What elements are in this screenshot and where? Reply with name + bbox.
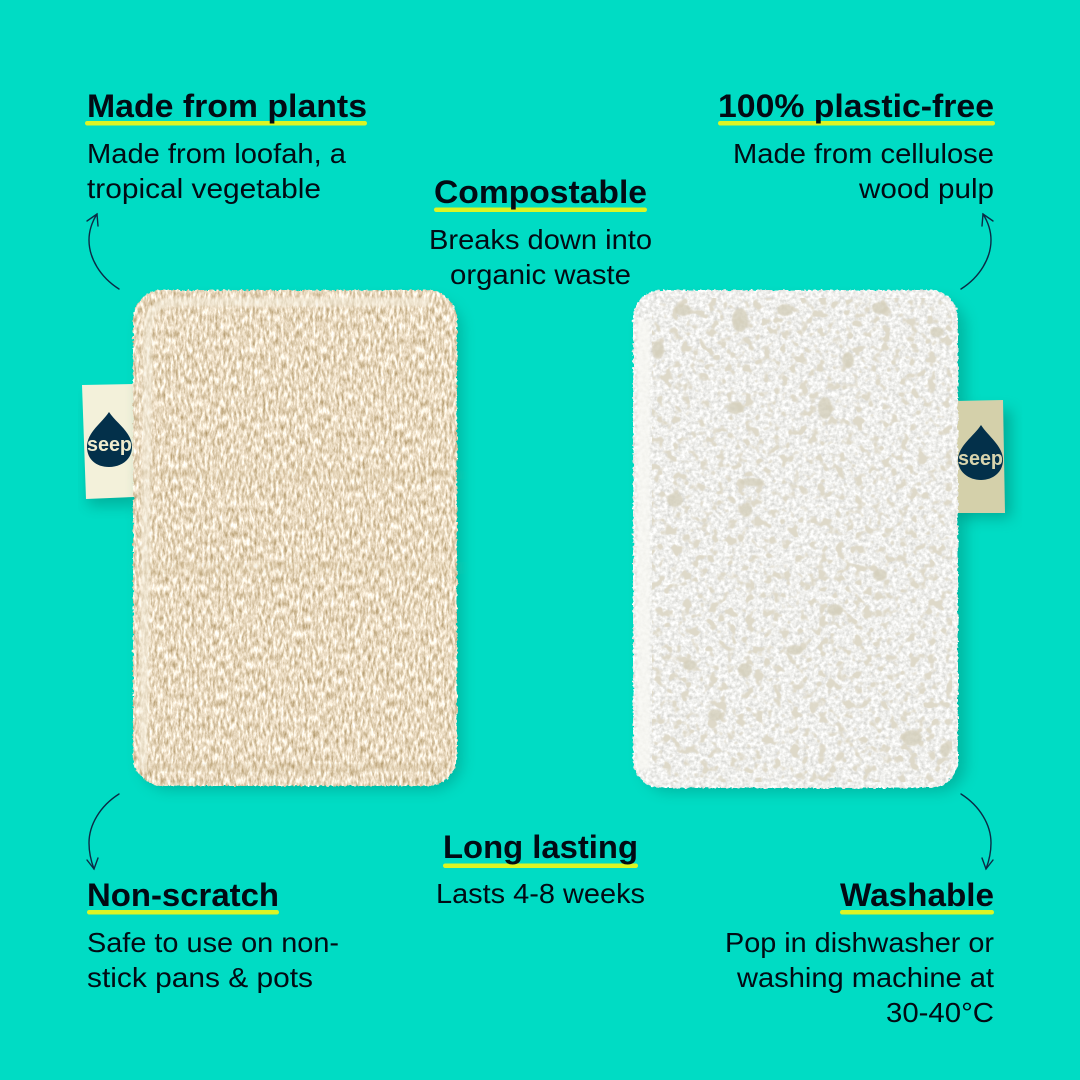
- sponge shadow: [642, 300, 966, 792]
- description: 30-40°C: [886, 997, 994, 1028]
- description: Made from cellulose: [733, 138, 994, 169]
- heading text: Long lasting: [443, 829, 638, 865]
- heading block: Non-scratch: [87, 877, 339, 993]
- heading text: Washable: [840, 877, 994, 913]
- heading underline: [85, 121, 367, 126]
- arrow: top right: [961, 214, 993, 289]
- heading underline: [87, 910, 279, 914]
- description: Breaks down into: [429, 224, 652, 255]
- heading block: 100% plastic-free: [718, 88, 995, 204]
- heading text: 100% plastic-free: [718, 88, 994, 124]
- description: Safe to use on non-: [87, 927, 339, 958]
- description: [87, 138, 346, 204]
- heading block: Long lasting: [436, 829, 645, 909]
- description: Made from loofah, a: [87, 138, 346, 169]
- cellulose pores: [652, 302, 950, 757]
- sponge tag: right: [955, 400, 1011, 518]
- description: [87, 927, 339, 993]
- description: wood pulp: [858, 173, 994, 204]
- heading block: Washable: [725, 877, 994, 1028]
- loofah body: [133, 290, 457, 786]
- arrow: bottom right: [961, 794, 993, 869]
- description: organic waste: [450, 259, 631, 290]
- arrow: top left: [87, 214, 119, 289]
- cellulose body: [633, 290, 958, 788]
- heading underline: [718, 121, 995, 126]
- arrow: bottom left: [87, 794, 119, 869]
- description: Lasts 4-8 weeks: [436, 878, 645, 909]
- description: stick pans & pots: [87, 962, 313, 993]
- heading underline: [434, 208, 647, 212]
- description: washing machine at: [736, 962, 994, 993]
- heading block: Made from plants: [85, 88, 367, 204]
- logo: seep drop: seep: [958, 448, 1003, 470]
- description: Pop in dishwasher or: [725, 927, 994, 958]
- description: [725, 927, 994, 1028]
- loofah sponge with tag: [82, 290, 462, 790]
- heading underline: [443, 864, 638, 868]
- sponge tag: left: [82, 384, 138, 506]
- loofah rim and bands: [140, 302, 455, 770]
- sponge shadow: [140, 300, 462, 790]
- left rim: [637, 320, 650, 770]
- logo: seep drop: seep: [87, 434, 132, 456]
- heading underline: [840, 910, 994, 914]
- heading text: Made from plants: [87, 88, 367, 124]
- cellulose sponge with tag: [633, 290, 1011, 792]
- description: [429, 224, 652, 290]
- heading text: Compostable: [434, 174, 647, 210]
- description: [733, 138, 994, 204]
- description: tropical vegetable: [87, 173, 321, 204]
- heading block: Compostable: [429, 174, 652, 290]
- organic pore network: [652, 298, 952, 782]
- heading text: Non-scratch: [87, 877, 279, 913]
